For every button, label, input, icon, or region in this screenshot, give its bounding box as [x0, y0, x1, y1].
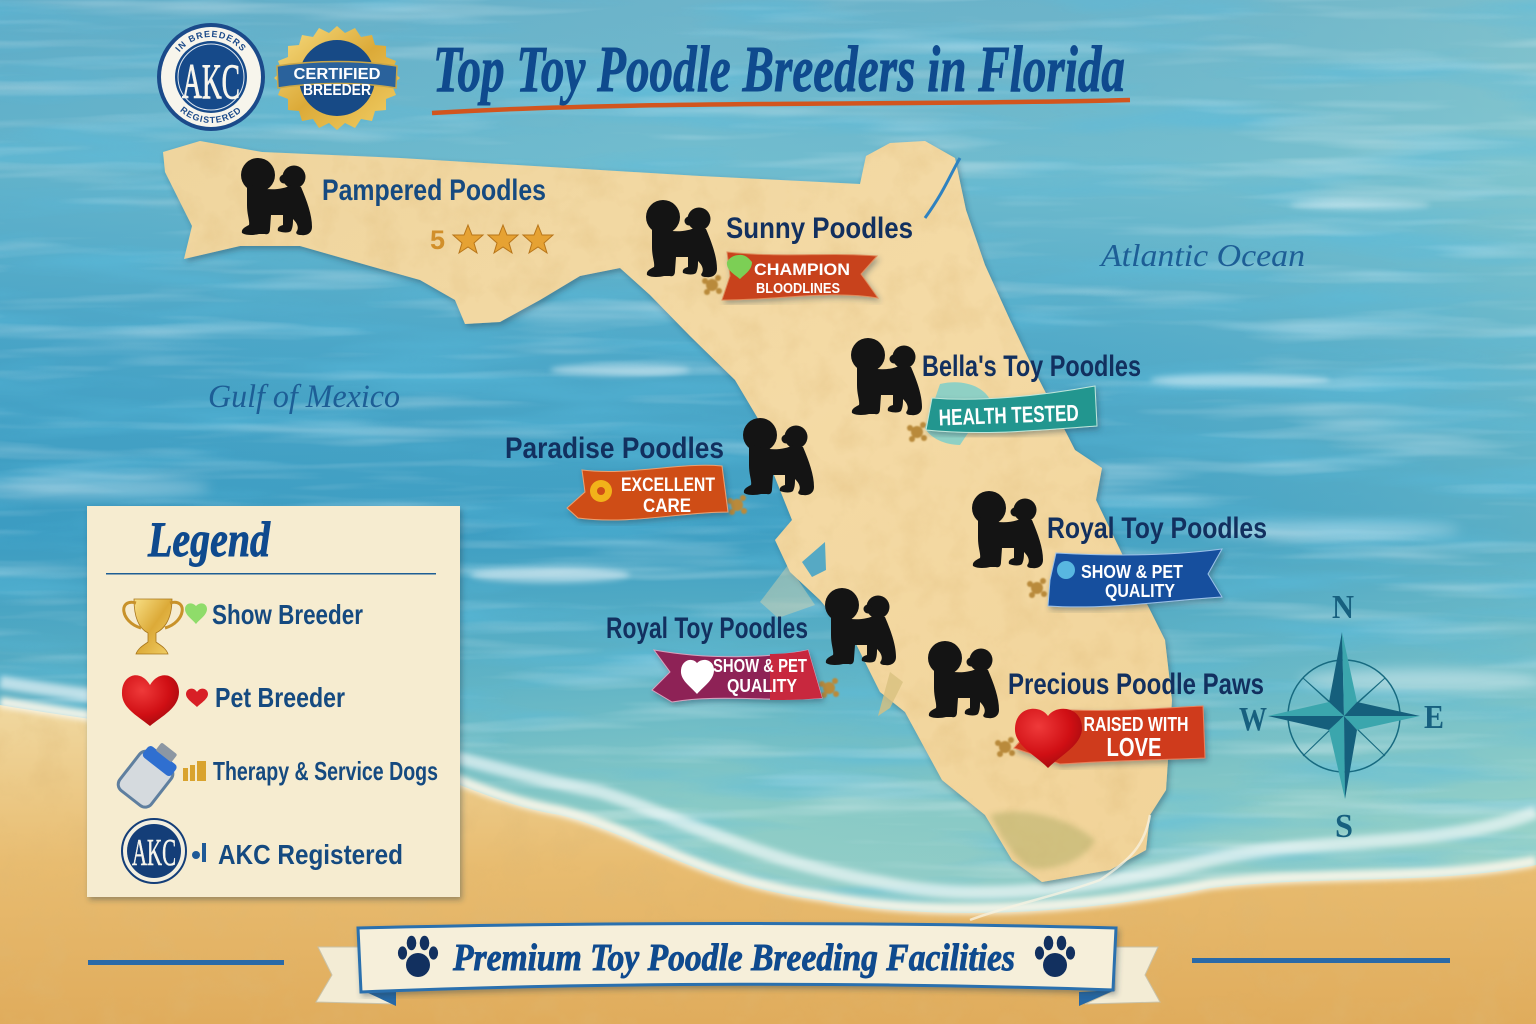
breeder: Paradise Poodles: Paradise Poodles: [505, 432, 724, 465]
breeder: Sunny Poodles: CHAMPION: [754, 260, 850, 279]
compass rose: S: [1335, 808, 1353, 845]
legend panel: [87, 506, 460, 897]
logo: AKC seal: [157, 23, 265, 131]
label: Gulf of Mexico: Gulf of Mexico: [208, 379, 400, 415]
breeder: Pampered Poodles: 5: [430, 225, 445, 255]
legend heading: Legend: [147, 511, 271, 567]
legend row: therapy and service dogs: Therapy & Service Dogs: [213, 756, 438, 786]
breeder: Royal Toy Poodles (west): SHOW & PET: [713, 656, 807, 676]
compass rose: E: [1424, 699, 1444, 736]
breeder: Paradise Poodles: CARE: [643, 496, 691, 517]
breeder: Bella's Toy Poodles: [851, 338, 1141, 445]
breeder: Royal Toy Poodles (east): SHOW & PET: [1081, 562, 1183, 582]
breeder: Pampered Poodles: [241, 158, 553, 255]
breeder: Royal Toy Poodles (east): QUALITY: [1105, 581, 1175, 601]
legend row: AKC registered: [122, 819, 403, 883]
title: Top Toy Poodle Breeders in Florida: [433, 33, 1125, 106]
breeder: Sunny Poodles: [646, 200, 913, 300]
breeder: Royal Toy Poodles (east): Royal Toy Poodles: [1047, 512, 1267, 545]
compass rose: [1239, 589, 1444, 845]
badge: certified breeder: CERTIFIED: [294, 66, 380, 83]
footer ribbon: [88, 924, 1450, 1006]
breeder: Royal Toy Poodles (west): [606, 588, 896, 702]
breeder: Precious Poodle Paws: [928, 641, 1264, 768]
breeder: Royal Toy Poodles (east): [972, 491, 1267, 607]
logo: AKC seal: AKC: [182, 53, 240, 109]
legend row: pet breeder: Pet Breeder: [215, 682, 345, 713]
breeder: Paradise Poodles: [505, 418, 814, 520]
breeder: Bella's Toy Poodles: HEALTH TESTED: [938, 400, 1079, 430]
logo: AKC seal: REGISTERED: [180, 106, 240, 123]
breeder: Pampered Poodles: Pampered Poodles: [322, 174, 546, 207]
legend row: show breeder: [124, 599, 363, 654]
legend row: AKC registered: AKC Registered: [218, 839, 403, 870]
Florida map: [150, 130, 1190, 920]
breeder: Precious Poodle Paws: Precious Poodle Paws: [1008, 668, 1264, 701]
breeder: Sunny Poodles: Sunny Poodles: [726, 212, 913, 245]
breeder: Bella's Toy Poodles: Bella's Toy Poodles: [922, 350, 1141, 383]
footer ribbon: Premium Toy Poodle Breeding Facilities: [452, 937, 1015, 979]
breeder: Royal Toy Poodles (west): Royal Toy Poodles: [606, 612, 808, 645]
compass rose: W: [1239, 701, 1267, 738]
breeder: Sunny Poodles: BLOODLINES: [756, 280, 840, 297]
legend row: pet breeder: [122, 675, 345, 726]
legend row: show breeder: Show Breeder: [212, 599, 363, 630]
breeder: Royal Toy Poodles (west): QUALITY: [727, 676, 797, 696]
breeder: Paradise Poodles: EXCELLENT: [621, 475, 715, 496]
logo: AKC seal: IN BREEDERS: [175, 30, 246, 52]
title: [432, 33, 1130, 113]
sandy beach and surf: [0, 682, 1536, 1024]
legend row: therapy and service dogs: [115, 736, 438, 810]
breeder: Precious Poodle Paws: RAISED WITH: [1084, 714, 1188, 736]
compass rose: N: [1332, 589, 1354, 626]
badge: certified breeder: [274, 26, 400, 130]
badge: certified breeder: BREEDER: [303, 82, 371, 99]
label: Atlantic Ocean: Atlantic Ocean: [1099, 237, 1305, 273]
legend row: AKC registered: AKC: [132, 832, 176, 874]
breeder: Precious Poodle Paws: LOVE: [1106, 732, 1162, 762]
